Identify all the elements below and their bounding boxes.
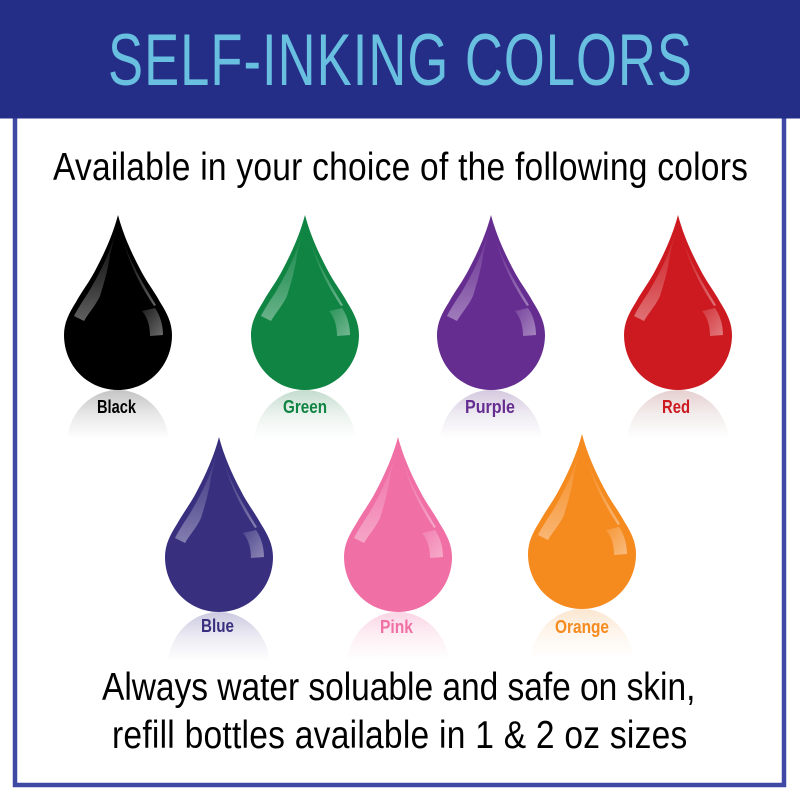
label: black: Black xyxy=(97,397,137,417)
footer note xyxy=(102,665,695,757)
footer note: refill bottles available in 1 & 2 oz sizes xyxy=(112,713,687,757)
label: purple: Purple xyxy=(465,397,515,417)
footer note: Always water soluable and safe on skin, xyxy=(102,665,695,709)
drop: black xyxy=(64,215,172,439)
drop: green xyxy=(251,215,359,439)
title: SELF-INKING COLORS xyxy=(108,20,692,101)
label: pink: Pink xyxy=(380,617,414,637)
label: green: Green xyxy=(283,397,327,417)
label: red: Red xyxy=(662,397,690,417)
label: blue: Blue xyxy=(201,616,234,636)
header band xyxy=(0,0,800,118)
subheading: Available in your choice of the following colors xyxy=(53,145,748,189)
drop: blue xyxy=(165,437,273,661)
drop: red xyxy=(624,215,732,439)
drop: pink xyxy=(344,437,452,661)
drop: orange xyxy=(528,434,636,658)
label: orange: Orange xyxy=(555,617,609,637)
drop: purple xyxy=(437,215,545,439)
